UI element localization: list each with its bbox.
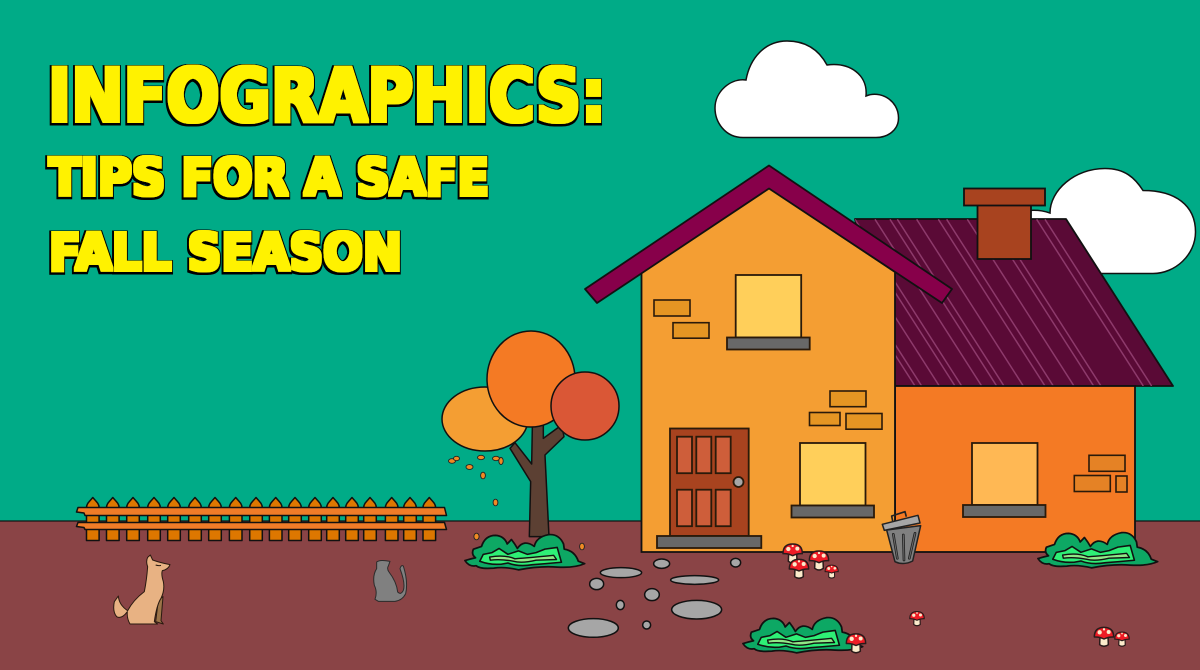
foliage centre	[487, 331, 575, 427]
gable roof	[585, 166, 952, 303]
mushrooms by house	[783, 544, 838, 578]
fence	[76, 498, 446, 540]
stepping stones	[568, 558, 741, 637]
dog	[114, 555, 170, 624]
foliage left	[442, 387, 528, 451]
trash can	[882, 512, 921, 564]
bricks	[654, 300, 882, 429]
foliage right	[551, 372, 619, 440]
cloud: behind house	[1020, 168, 1196, 274]
fence rails	[76, 508, 446, 530]
wing window	[963, 443, 1046, 517]
right roof	[854, 218, 1174, 387]
door	[657, 428, 761, 548]
cat	[374, 560, 407, 601]
background: ground	[0, 521, 1200, 670]
house	[585, 166, 1173, 552]
mushroom lone	[910, 612, 924, 626]
tree	[442, 331, 619, 550]
main wall	[642, 188, 895, 552]
chimney	[964, 188, 1045, 259]
upper window	[727, 275, 810, 350]
bush right	[1038, 533, 1158, 568]
tree trunk	[510, 410, 564, 537]
falling leaves	[448, 455, 584, 550]
fence pickets	[86, 498, 436, 540]
title line 3: FALL SEASON	[49, 224, 402, 283]
cloud: top	[715, 41, 898, 138]
right wing wall	[895, 386, 1135, 552]
mushrooms bottom right	[1094, 627, 1129, 646]
bush front	[743, 618, 863, 653]
wing bricks	[1074, 455, 1127, 492]
title line 1: INFOGRAPHICS:	[48, 54, 606, 139]
title line 2: TIPS FOR A SAFE	[49, 149, 489, 208]
background: sky	[0, 0, 1200, 522]
mushroom near front bush	[846, 634, 866, 653]
title	[48, 54, 606, 283]
bush by tree	[465, 535, 585, 570]
lower window	[792, 443, 874, 518]
